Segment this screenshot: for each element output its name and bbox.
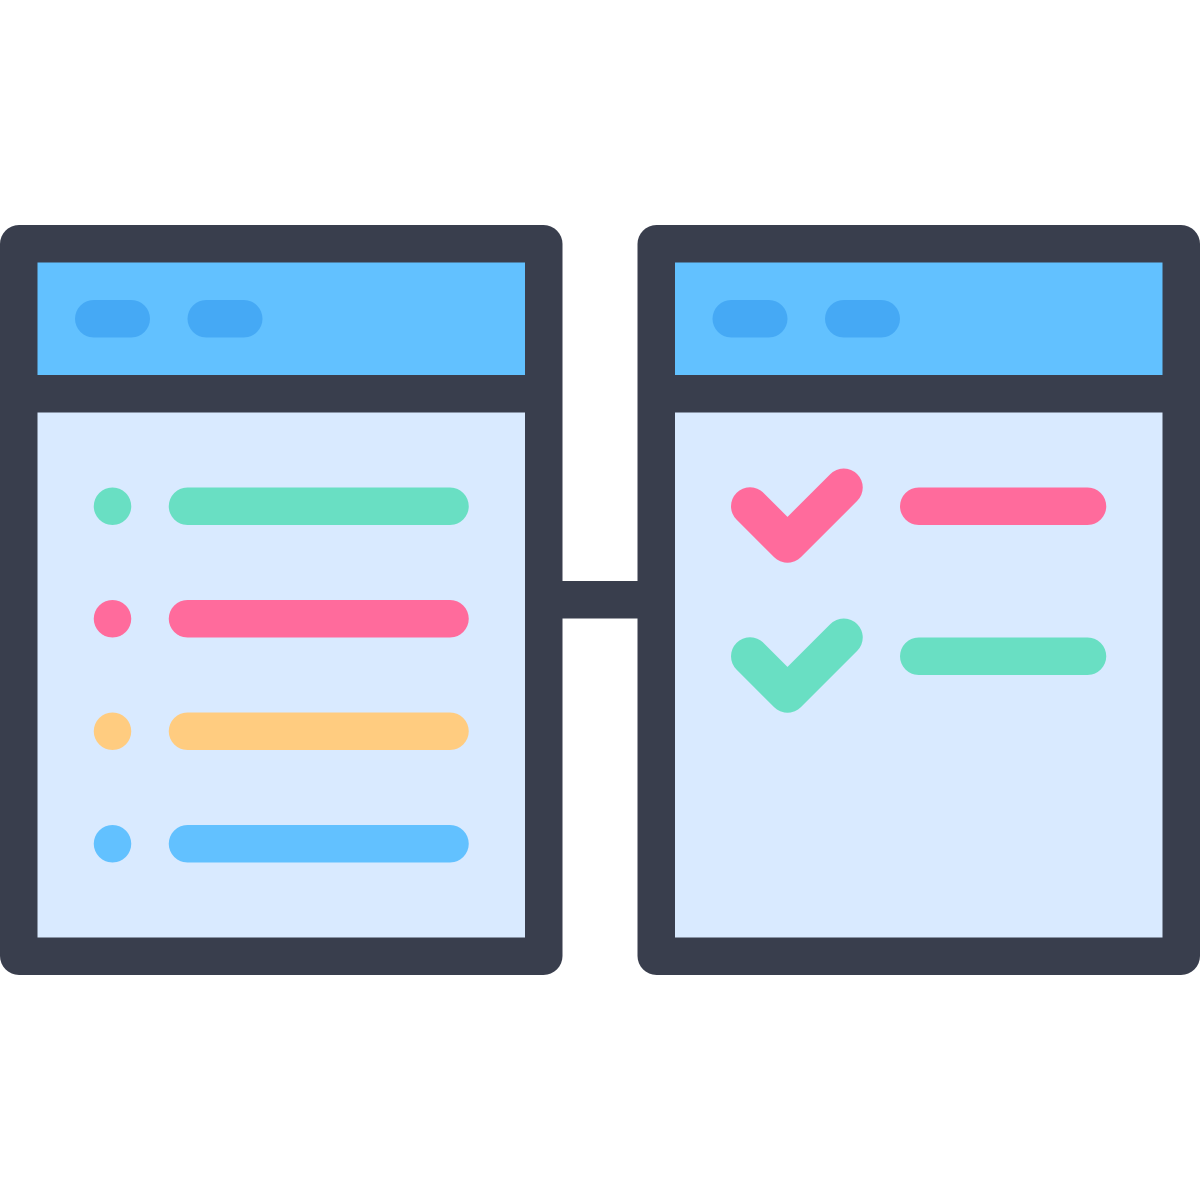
green line	[900, 638, 1106, 675]
checked row: green	[750, 638, 1106, 694]
panel: right window	[638, 225, 1200, 975]
right window body	[675, 412, 1162, 938]
icon: pink check mark	[750, 488, 844, 544]
right window frame	[638, 225, 1200, 975]
left header buttons	[75, 300, 262, 338]
right header buttons	[712, 300, 900, 338]
left window frame	[0, 225, 562, 975]
pink line	[900, 488, 1106, 525]
icon: green check mark	[750, 638, 844, 694]
list row: green	[94, 488, 469, 525]
list row: pink	[94, 600, 469, 638]
right window header	[675, 262, 1162, 375]
left window header	[38, 262, 525, 375]
list row: blue	[94, 825, 469, 862]
connector between windows	[540, 581, 660, 618]
checked row: pink	[750, 488, 1106, 544]
list row: orange	[94, 712, 469, 750]
left window body	[38, 412, 525, 938]
panel: left window	[0, 225, 562, 975]
